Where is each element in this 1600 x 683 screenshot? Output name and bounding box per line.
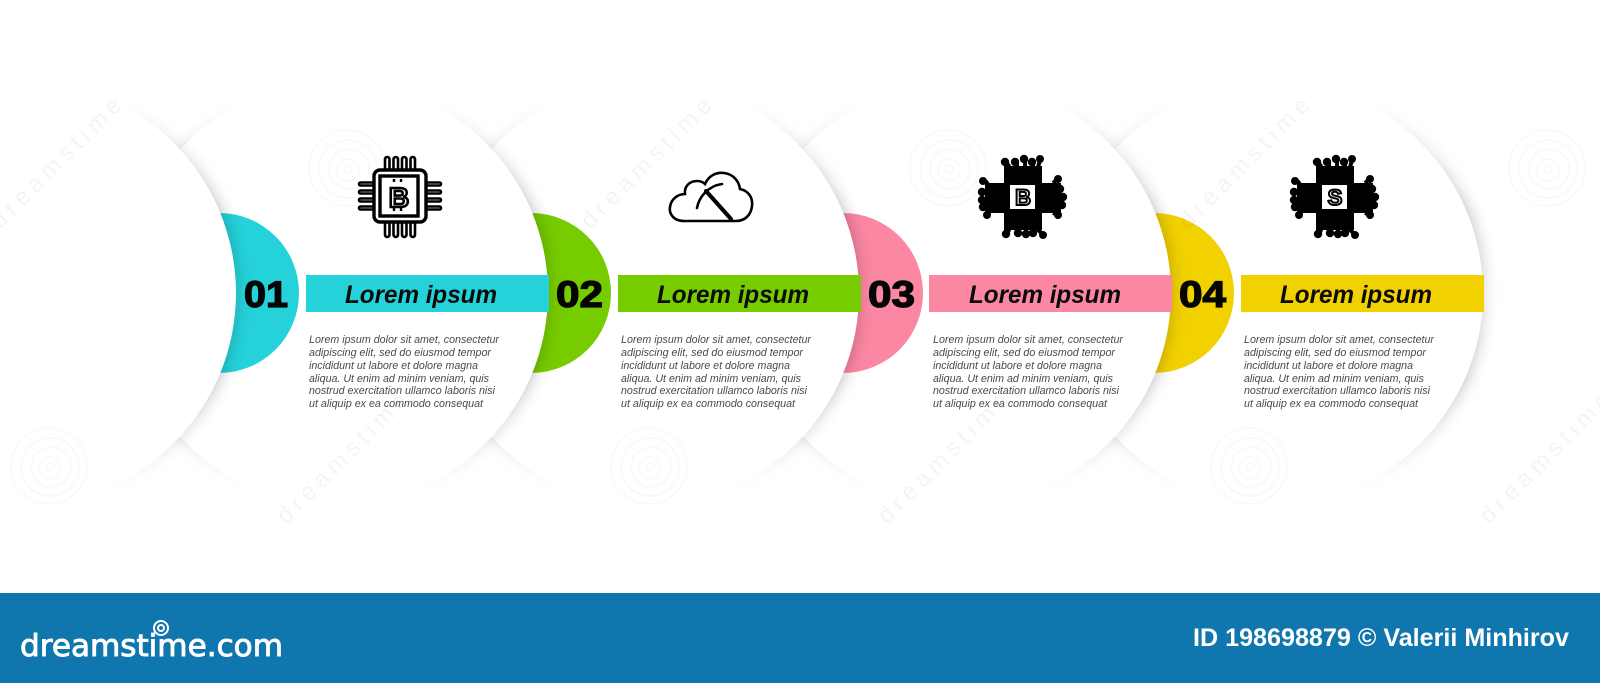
panel: step 04: [1112, 127, 1490, 464]
icon: circuit B: B: [1015, 185, 1031, 210]
heading 04: Lorem ipsum: [1280, 281, 1432, 309]
banner 02: [618, 275, 861, 312]
circle panel 03: [800, 127, 1178, 464]
watermark spirals: [11, 130, 1585, 504]
body text 04: aliqua. Ut enim ad minim veniam, quis: [1244, 373, 1425, 385]
footer logo: dreamstime.com: [20, 629, 283, 664]
icon: bitcoin chip: [359, 157, 441, 237]
watermark text: dreamstime: [1173, 91, 1316, 234]
banner 01: [306, 275, 549, 312]
icon: cloud with pickaxe: [670, 173, 752, 221]
body text 03: [933, 334, 1123, 410]
body text 04: nostrud exercitation ullamco laboris nisi: [1244, 385, 1431, 397]
watermark text: dreamstime: [271, 386, 414, 529]
circle panel 01: [178, 127, 554, 464]
icon: circuit S: S: [1328, 185, 1342, 210]
icon: circuit S: [1290, 155, 1379, 239]
left circle cover: [118, 127, 243, 464]
watermark text: dreamstime: [575, 91, 718, 234]
body text 04: adipiscing elit, sed do eiusmod tempor: [1244, 347, 1426, 359]
watermark text: [0, 91, 1600, 529]
body text 04: ut aliquip ex ea commodo consequat: [1244, 398, 1419, 410]
panel: step 01: [178, 127, 554, 464]
number disc 01: [139, 213, 299, 373]
body text 01: nostrud exercitation ullamco laboris nisi: [309, 385, 496, 397]
watermark text: dreamstime: [872, 386, 1015, 529]
body text 02: [621, 334, 811, 410]
number 04: 04: [1179, 274, 1226, 315]
icon: circuit B: [978, 155, 1067, 239]
body text 03: nostrud exercitation ullamco laboris nisi: [933, 385, 1120, 397]
body text 02: ut aliquip ex ea commodo consequat: [621, 398, 796, 410]
body text 02: aliqua. Ut enim ad minim veniam, quis: [621, 373, 802, 385]
number disc 04: [1074, 213, 1234, 373]
body text 04: Lorem ipsum dolor sit amet, consectetur: [1244, 334, 1434, 346]
circle panel 02: [490, 127, 866, 464]
number disc 03: [763, 213, 923, 373]
body text 04: incididunt ut labore et dolore magna: [1244, 360, 1413, 372]
heading 03: Lorem ipsum: [969, 281, 1121, 309]
body text 03: aliqua. Ut enim ad minim veniam, quis: [933, 373, 1114, 385]
body text 01: incididunt ut labore et dolore magna: [309, 360, 478, 372]
number 01: 01: [244, 274, 288, 315]
panel: step 02: [490, 127, 866, 464]
panel: step 03: [800, 127, 1178, 464]
banner 04: [1241, 275, 1484, 312]
icon: bitcoin chip: B: [389, 182, 409, 213]
number disc 02: [451, 213, 611, 373]
body text 01: adipiscing elit, sed do eiusmod tempor: [309, 347, 491, 359]
body text 02: nostrud exercitation ullamco laboris nisi: [621, 385, 808, 397]
heading 01: Lorem ipsum: [345, 281, 497, 309]
heading 02: Lorem ipsum: [657, 281, 809, 309]
footer credit: ID 198698879 © Valerii Minhirov: [1193, 624, 1569, 652]
circle panel 04: [1112, 127, 1490, 464]
body text 01: Lorem ipsum dolor sit amet, consectetur: [309, 334, 499, 346]
body text 02: adipiscing elit, sed do eiusmod tempor: [621, 347, 803, 359]
body text 02: Lorem ipsum dolor sit amet, consectetur: [621, 334, 811, 346]
number 02: 02: [556, 274, 603, 315]
body text 04: [1244, 334, 1434, 410]
body text 02: incididunt ut labore et dolore magna: [621, 360, 790, 372]
body text 01: ut aliquip ex ea commodo consequat: [309, 398, 484, 410]
body text 03: incididunt ut labore et dolore magna: [933, 360, 1102, 372]
banner 03: [929, 275, 1172, 312]
body text 01: aliqua. Ut enim ad minim veniam, quis: [309, 373, 490, 385]
footer bar: [0, 593, 1600, 683]
body text 03: ut aliquip ex ea commodo consequat: [933, 398, 1108, 410]
body text 03: adipiscing elit, sed do eiusmod tempor: [933, 347, 1115, 359]
body text 01: [309, 334, 499, 410]
number 03: 03: [868, 274, 915, 315]
body text 03: Lorem ipsum dolor sit amet, consectetur: [933, 334, 1123, 346]
